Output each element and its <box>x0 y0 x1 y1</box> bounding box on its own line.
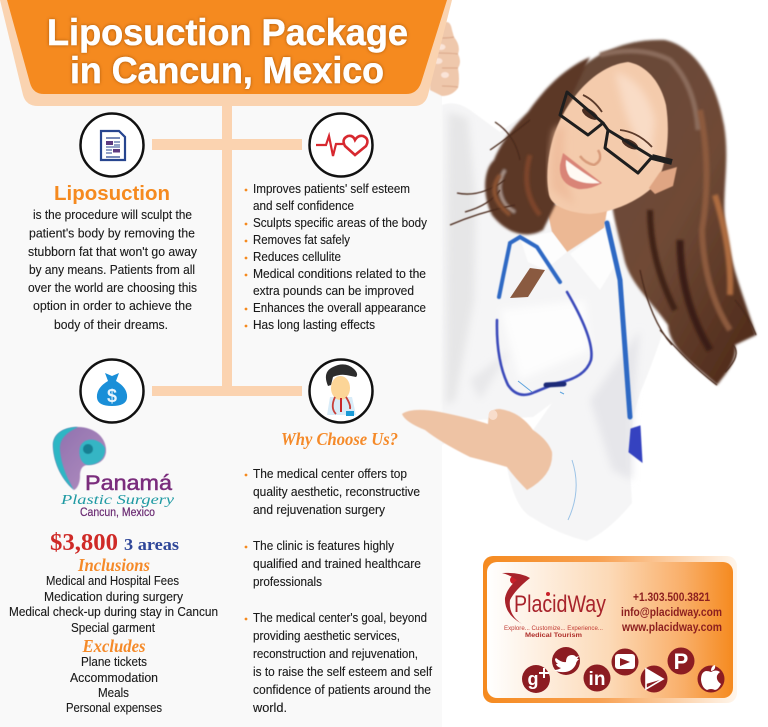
text: description: over the world are choosing this <box>28 280 197 295</box>
nose shadow <box>580 150 600 165</box>
list: inclusions: Medical and Hospital Fees <box>46 573 179 588</box>
heading: Why Choose Us: Why Choose Us? <box>281 429 398 449</box>
hair back <box>558 40 756 385</box>
icon: heartbeat <box>310 114 372 176</box>
list: benefits: extra pounds can be improved <box>253 283 414 298</box>
eyes <box>580 95 652 152</box>
text: description: patient's body by removing the <box>29 226 195 240</box>
title: Liposuction Package <box>47 12 408 53</box>
glasses <box>560 92 672 173</box>
list: inclusions <box>9 573 218 635</box>
lower hand <box>402 409 552 490</box>
social icons <box>522 647 724 693</box>
text: why choose us points: and rejuvenation surgery <box>253 502 385 517</box>
text: description: body of their dreams. <box>54 317 168 332</box>
list: benefits: Sculpts specific areas of the body <box>253 215 427 230</box>
text: description <box>28 207 197 332</box>
shell body <box>53 427 106 490</box>
price: 3 areas <box>124 535 179 554</box>
contact details: +1.303.500.3821 <box>633 592 711 604</box>
list: excludes: Meals <box>98 685 129 700</box>
icon: document <box>80 114 144 176</box>
text: why choose us points: is to raise the self esteem and self <box>253 664 432 679</box>
price <box>50 530 179 556</box>
stethoscope <box>497 223 642 462</box>
text: why choose us points: The medical center's goal, beyond <box>253 610 427 625</box>
list: benefits: and self confidence <box>253 198 354 213</box>
icon: money bag <box>80 360 144 422</box>
face <box>547 62 668 214</box>
logo: Panama Plastic Surgery: Plastic Surgery <box>60 493 175 508</box>
hair left waves <box>485 57 590 234</box>
text: description: option in order to achieve the <box>33 298 192 313</box>
text: why choose us points: confidence of patients around the <box>253 682 431 697</box>
price: $3,800 <box>50 530 118 556</box>
logo: PlacidWay: Medical Tourism <box>525 632 582 639</box>
contact details: www.placidway.com <box>621 622 722 634</box>
icon: money bag: $ <box>107 386 117 406</box>
text: description: stubborn fat that won't go away <box>28 244 197 259</box>
social icons: in <box>589 669 605 690</box>
shirt collar <box>520 228 617 290</box>
list: excludes: Accommodation <box>70 670 158 685</box>
logo: PlacidWay: Explore... Customize... Experience... <box>504 625 603 632</box>
heading: Inclusions: Inclusions <box>77 555 150 575</box>
list: benefits: Medical conditions related to the <box>253 266 426 281</box>
shell outer band <box>53 427 78 490</box>
logo: PlacidWay <box>502 573 606 639</box>
list: excludes: Plane tickets <box>81 654 147 669</box>
list: benefits <box>245 181 427 332</box>
text: why choose us points: The clinic is features highly <box>253 538 394 553</box>
list: benefits: Reduces cellulite <box>253 249 341 264</box>
social icons: g <box>528 669 538 689</box>
text: why choose us points: qualified and trained healthcare <box>253 556 421 571</box>
text: why choose us points <box>245 466 432 715</box>
heading: Excludes: Excludes <box>82 636 146 656</box>
contact details <box>621 592 722 634</box>
connector lines <box>152 104 302 396</box>
list: benefits: Has long lasting effects <box>253 317 375 332</box>
list: excludes: Personal expenses <box>66 700 162 715</box>
list: inclusions: Medication during surgery <box>44 589 183 604</box>
text: why choose us points: professionals <box>253 574 322 589</box>
list: inclusions: Medical check-up during stay in Cancun <box>9 604 218 619</box>
list: excludes <box>66 654 162 715</box>
text: why choose us points: The medical center offers top <box>253 466 407 481</box>
panel: background sheet <box>0 0 442 727</box>
text: why choose us points: world. <box>252 700 287 715</box>
photo: doctor <box>402 22 756 541</box>
lab coat <box>442 103 662 541</box>
list: benefits: Removes fat safely <box>253 232 350 247</box>
logo: Panama Plastic Surgery: Panamá <box>85 472 172 495</box>
title <box>47 12 408 91</box>
text: why choose us points: providing aesthetic services, <box>253 628 400 643</box>
ear <box>649 167 677 194</box>
heading: Liposuction: Liposuction <box>54 183 170 205</box>
list: benefits: Improves patients' self esteem <box>253 181 410 196</box>
social icons: P <box>674 649 688 674</box>
header banner <box>0 0 452 106</box>
panel: PlacidWay contact card <box>483 556 737 703</box>
shell spiral <box>79 440 105 465</box>
neck <box>546 205 608 252</box>
title: in Cancun, Mexico <box>70 50 384 91</box>
logo: Panama Plastic Surgery <box>53 427 175 519</box>
text: why choose us points: reconstruction and rejuvenation, <box>253 646 418 661</box>
list: inclusions: Special garment <box>71 620 155 635</box>
logo: PlacidWay: PlacidWay <box>514 591 606 618</box>
text: why choose us points: quality aesthetic, reconstructive <box>253 484 420 499</box>
list: benefits: Enhances the overall appearance <box>253 300 426 315</box>
mouth <box>560 153 602 189</box>
logo: Panama Plastic Surgery: Cancun, Mexico <box>80 507 155 519</box>
upper hand <box>430 22 460 96</box>
shirt opening <box>510 268 545 298</box>
icon: doctor <box>310 360 372 422</box>
contact details: info@placidway.com <box>621 607 722 619</box>
text: description: by any means. Patients from all <box>29 262 195 277</box>
text: description: is the procedure will sculpt the <box>33 207 192 222</box>
hair strands and highlights <box>450 51 756 385</box>
